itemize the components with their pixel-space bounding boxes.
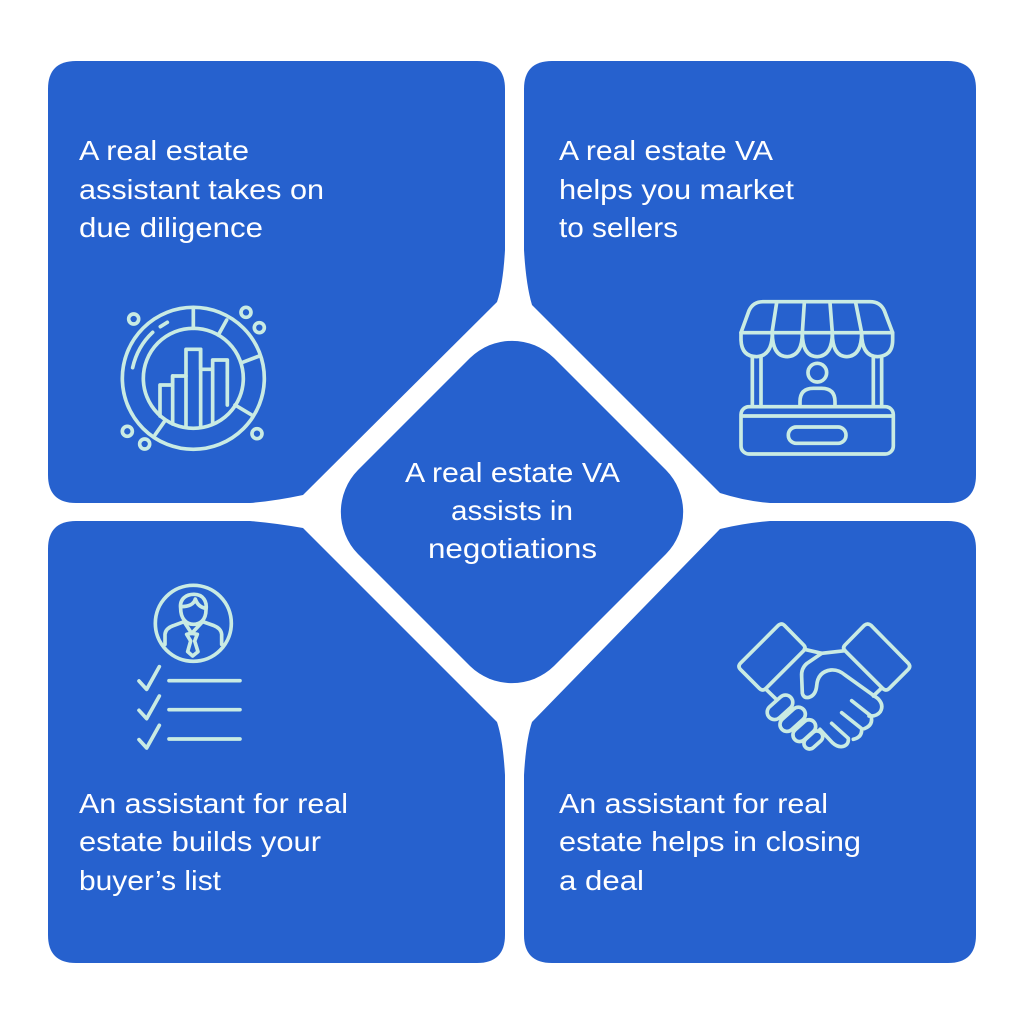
icon: chart in a ring — [122, 307, 264, 449]
text: buyer's list — [79, 788, 348, 896]
text: buyer's list: estate builds your — [79, 826, 321, 857]
text: negotiations: assists in — [451, 495, 573, 526]
text: due diligence: due diligence — [79, 212, 263, 243]
icon: market stall — [741, 302, 893, 454]
text: buyer's list: buyer’s list — [79, 865, 221, 896]
text: due diligence: A real estate — [79, 135, 249, 166]
text: due diligence: assistant takes on — [79, 174, 324, 205]
panel: top left — [48, 61, 505, 503]
text: negotiations: A real estate VA — [405, 457, 621, 488]
panel: bottom right — [524, 521, 976, 963]
panel: bottom left — [48, 521, 505, 963]
text: due diligence — [79, 135, 324, 243]
text: market to sellers: to sellers — [559, 212, 678, 243]
text: closing a deal: estate helps in closing — [559, 826, 861, 857]
icon: handshake — [739, 624, 910, 751]
text: closing a deal: An assistant for real — [559, 788, 828, 819]
text: market to sellers — [559, 135, 794, 243]
icon: person with checklist — [139, 585, 240, 748]
text: buyer's list: An assistant for real — [79, 788, 348, 819]
panel: center diamond — [341, 341, 683, 683]
text: market to sellers: helps you market — [559, 174, 794, 205]
panel: top right — [524, 61, 976, 503]
text: market to sellers: A real estate VA — [559, 135, 774, 166]
text: closing a deal: a deal — [559, 865, 644, 896]
text: negotiations — [405, 457, 621, 564]
text: negotiations: negotiations — [428, 533, 597, 564]
text: closing a deal — [559, 788, 861, 896]
